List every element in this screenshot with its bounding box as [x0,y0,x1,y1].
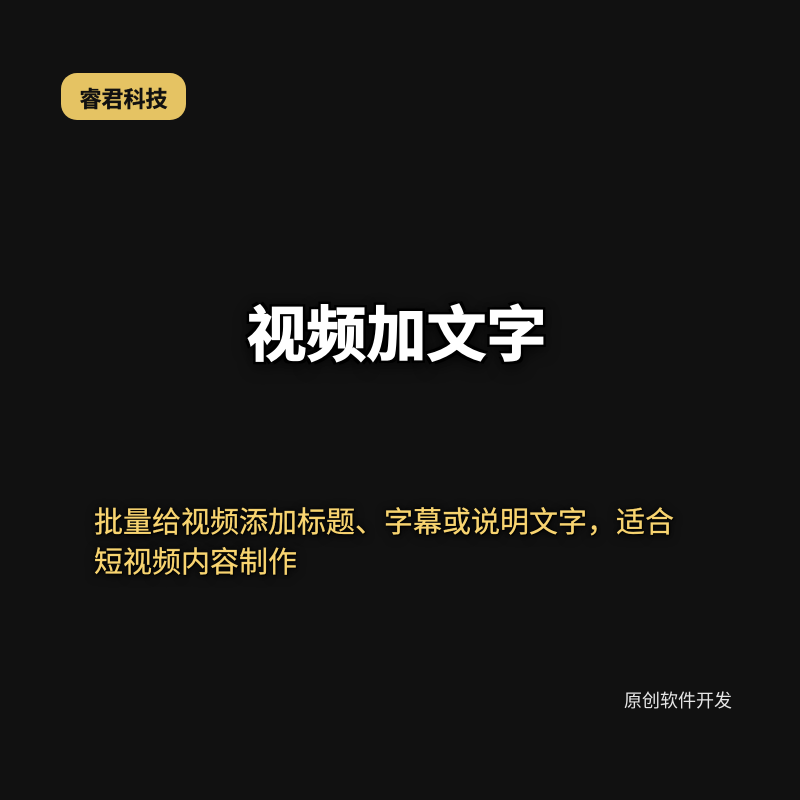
description text: 短视频内容制作 [94,547,297,579]
description text [94,507,674,579]
footer note: 原创软件开发 [624,691,732,711]
brand badge: 睿君科技 [79,87,168,112]
description text: 批量给视频添加标题、字幕或说明文字，适合 [94,507,674,539]
title: 视频加文字 [246,302,546,369]
brand badge [61,73,186,120]
